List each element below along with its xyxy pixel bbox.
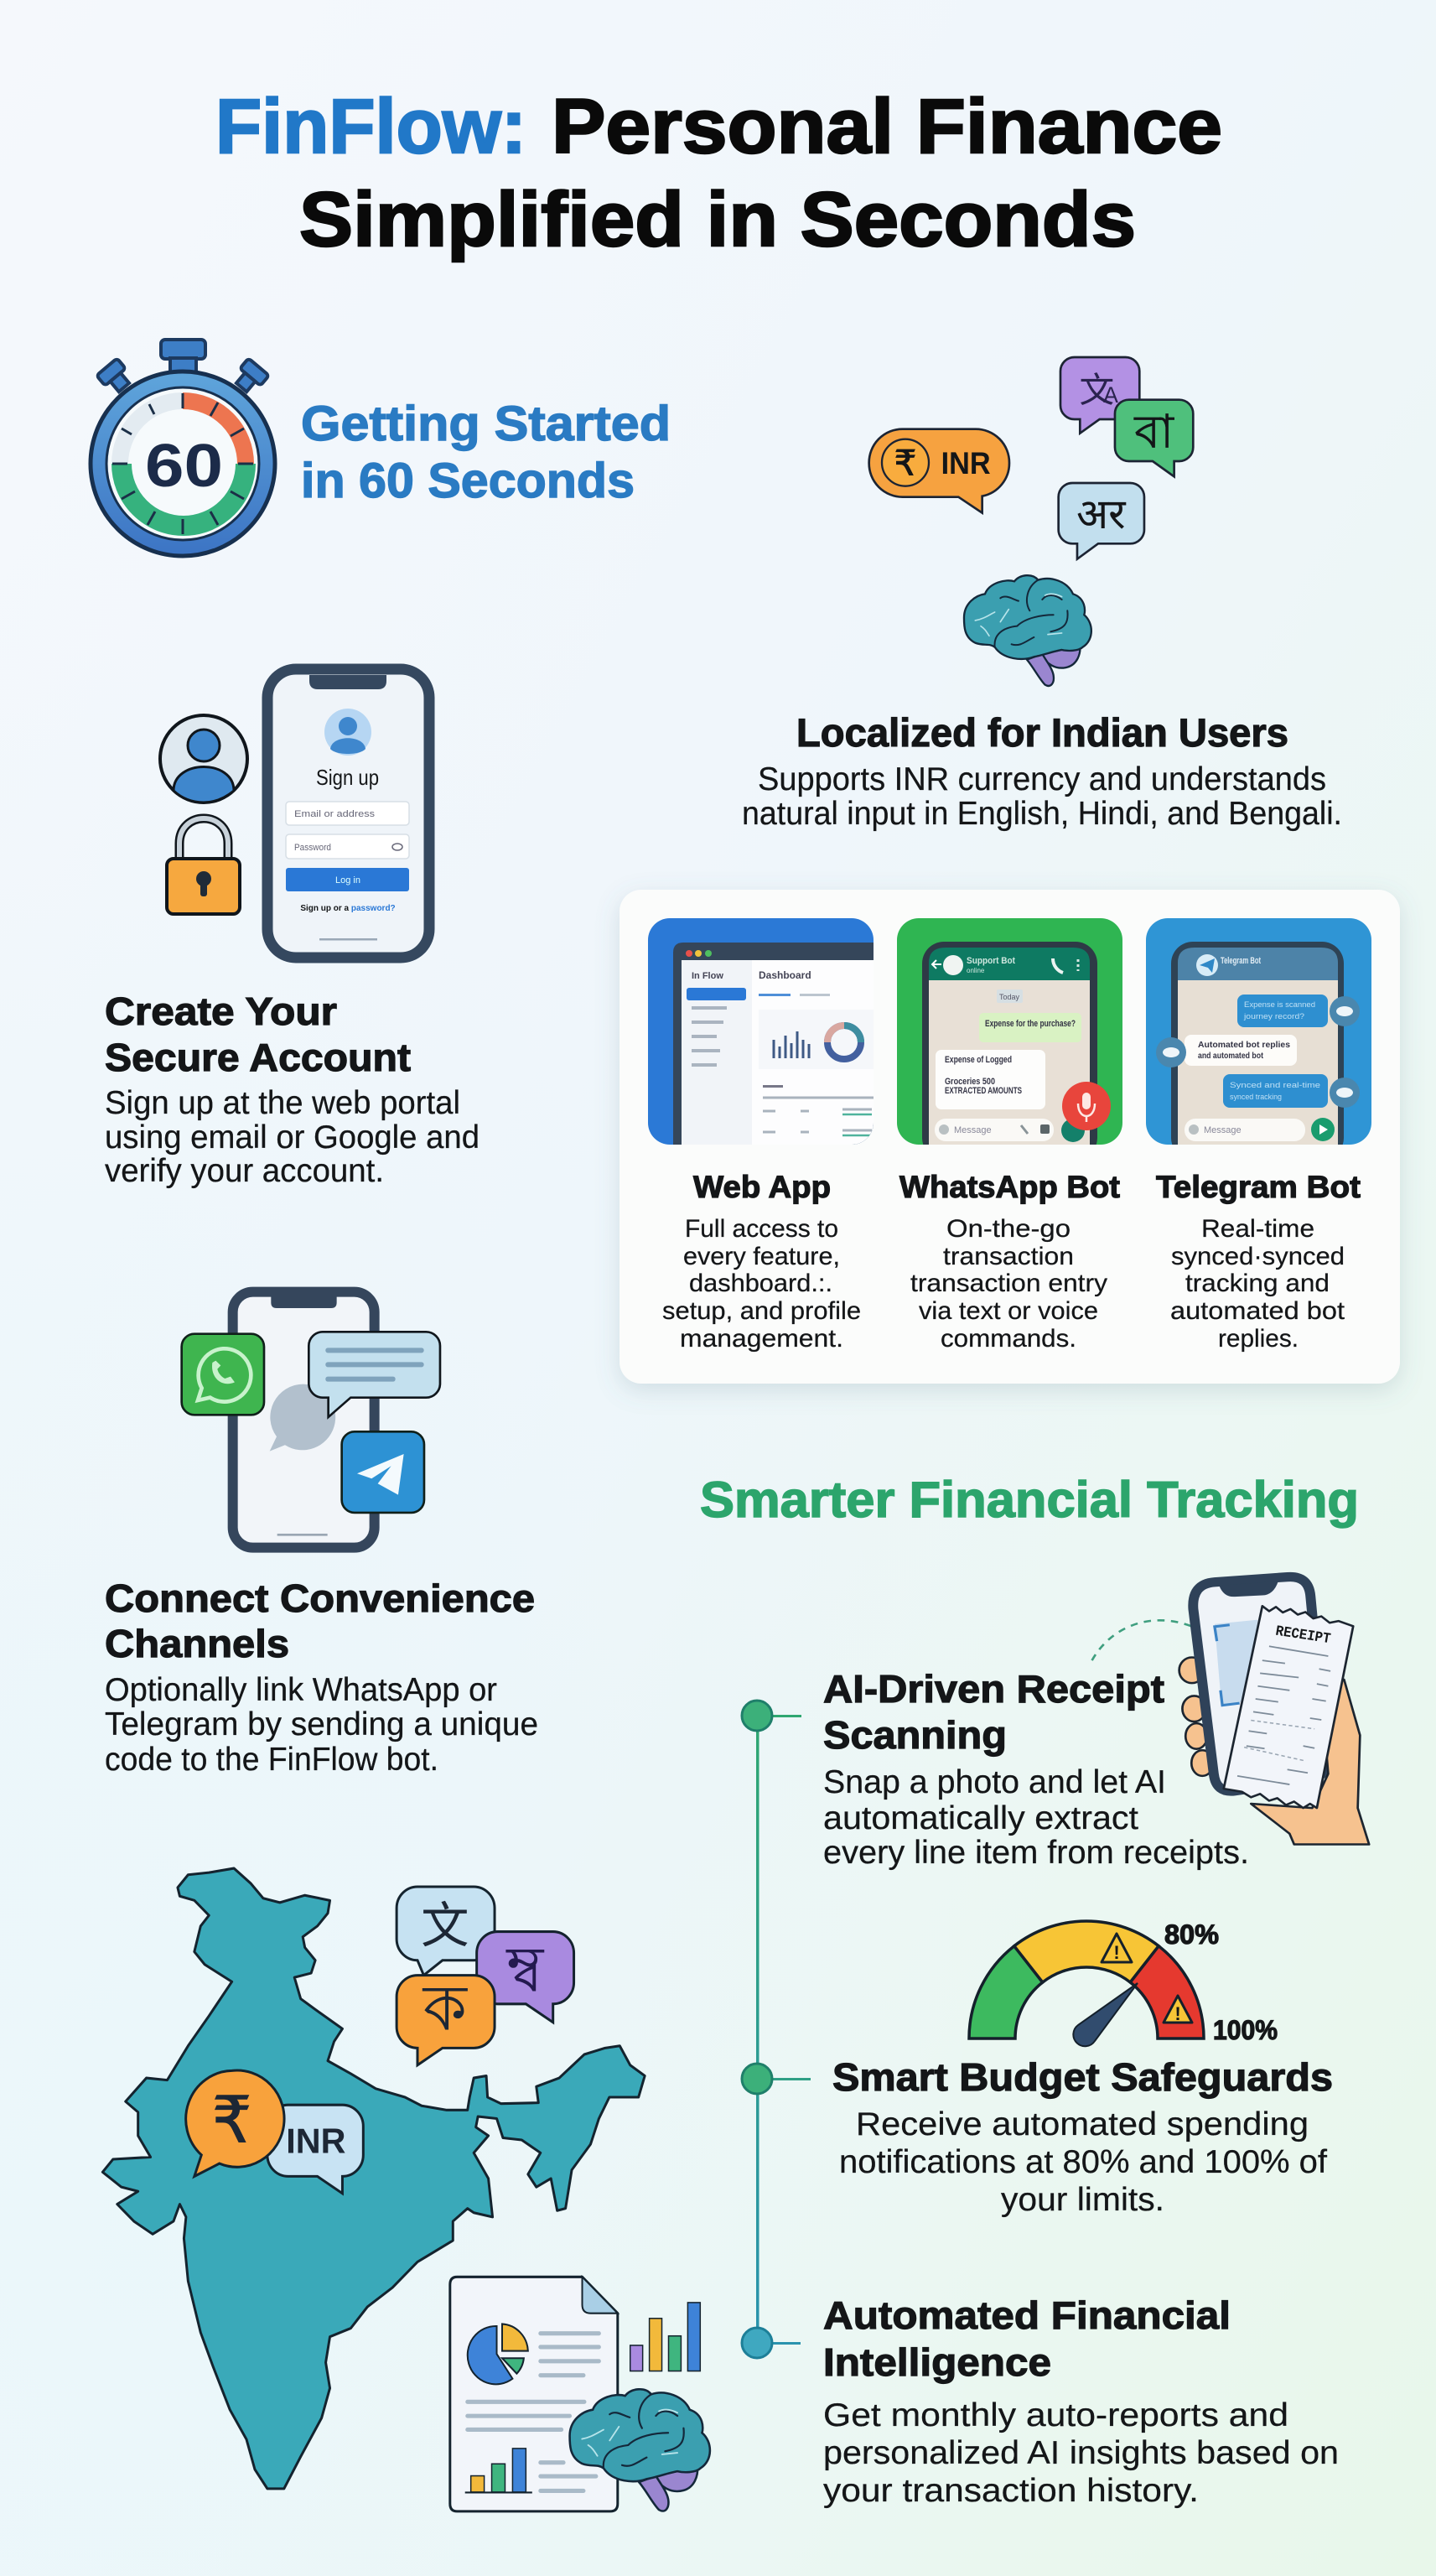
- title: Simplified in Seconds: [299, 177, 1136, 262]
- feature: receipt scanning: every line item from receipts.: [823, 1835, 1249, 1871]
- tile: whatsapp screenshot: [897, 918, 1122, 1160]
- tile: whatsapp screenshot: Groceries 500: [945, 1077, 995, 1087]
- tile: telegram screenshot: Message: [1204, 1125, 1242, 1135]
- feature: budget safeguards: your limits.: [1001, 2182, 1164, 2218]
- timeline: [742, 1701, 811, 2358]
- column: web app: Full access to: [685, 1215, 838, 1243]
- feature: financial intelligence: Get monthly auto-reports and: [823, 2397, 1288, 2433]
- column: telegram bot: tracking and: [1185, 1270, 1330, 1297]
- feature: receipt scanning: AI-Driven Receipt: [823, 1667, 1164, 1711]
- feature: receipt scanning: Snap a photo and let AI: [823, 1764, 1166, 1800]
- icon: hand scanning receipt: [1092, 1576, 1369, 1844]
- tile: web app screenshot: Dashboard: [759, 969, 811, 981]
- icon: hand scanning receipt: RECEIPT: [1274, 1623, 1332, 1648]
- map: india: INR: [286, 2122, 345, 2160]
- bubble: rupee: [186, 2070, 284, 2176]
- tile: telegram screenshot: and automated bot: [1198, 1052, 1264, 1061]
- tile: telegram screenshot: Telegram Bot: [1221, 956, 1261, 966]
- icon: user avatar: [160, 715, 247, 802]
- icon: language and currency bubbles: A: [1103, 382, 1118, 408]
- column: whatsapp bot: On-the-go: [946, 1215, 1071, 1243]
- tile: whatsapp screenshot: online: [967, 967, 985, 974]
- chart: budget gauge: !: [1113, 1942, 1120, 1963]
- icon: phone signup: Log in: [335, 875, 360, 886]
- tile: telegram screenshot: [1146, 918, 1371, 1160]
- icon: phone signup: Password: [294, 843, 331, 853]
- feature: receipt scanning: Scanning: [823, 1713, 1007, 1757]
- heading: getting started: [301, 397, 671, 508]
- column: web app: [662, 1170, 861, 1353]
- column: web app: setup, and profile: [662, 1297, 861, 1325]
- title: [215, 84, 1222, 262]
- icon: language and currency bubbles: अर: [1076, 491, 1127, 538]
- tile: whatsapp screenshot: Expense of Logged: [945, 1055, 1012, 1065]
- icon: phone signup: Sign up: [316, 765, 379, 790]
- feature: budget safeguards: Receive automated spending: [856, 2106, 1309, 2142]
- bubble: languages: [397, 1887, 574, 2065]
- chart: budget gauge: 80%: [1164, 1919, 1219, 1950]
- bubble: languages: ম্ব: [505, 1935, 545, 2006]
- icon: language and currency bubbles: [869, 357, 1193, 686]
- icon: padlock: [167, 818, 240, 914]
- feature: financial intelligence: [823, 2293, 1339, 2509]
- column: telegram bot: synced·synced: [1171, 1243, 1345, 1270]
- step: connect channels: Channels: [105, 1622, 289, 1665]
- step: connect channels: Connect Convenience: [105, 1576, 535, 1620]
- icon: report document: [450, 2277, 710, 2511]
- chart: budget gauge: 100%: [1213, 2015, 1278, 2045]
- heading: smarter financial tracking: Smarter Financial Tracking: [700, 1472, 1359, 1528]
- column: telegram bot: replies.: [1218, 1325, 1299, 1353]
- step: create account: Sign up at the web portal: [105, 1085, 460, 1121]
- tile: telegram screenshot: Expense is scanned: [1244, 1000, 1315, 1009]
- column: whatsapp bot: via text or voice: [919, 1297, 1098, 1325]
- column: telegram bot: Telegram Bot: [1156, 1170, 1361, 1204]
- icon: stopwatch: 60: [145, 433, 223, 500]
- feature: budget safeguards: notifications at 80% and 100% of: [839, 2144, 1327, 2180]
- chart: budget gauge: [969, 1919, 1278, 2046]
- step: create account: [105, 989, 480, 1189]
- column: whatsapp bot: [899, 1170, 1120, 1353]
- chart: budget gauge: !: [1174, 2003, 1181, 2024]
- map: india: ₹: [212, 2085, 251, 2157]
- heading: getting started: Getting Started: [301, 397, 671, 451]
- column: web app: management.: [680, 1325, 843, 1353]
- column: whatsapp bot: transaction entry: [910, 1270, 1107, 1297]
- icon: phone signup: Email or address: [294, 809, 376, 819]
- tile: web app screenshot: In Flow: [692, 971, 723, 981]
- text: localized description: Supports INR currency and understands: [758, 761, 1326, 797]
- icon: stopwatch: [91, 340, 275, 556]
- column: telegram bot: automated bot: [1170, 1297, 1345, 1325]
- column: telegram bot: Real-time: [1201, 1215, 1314, 1243]
- tile: whatsapp screenshot: Support Bot: [967, 956, 1015, 966]
- column: web app: Web App: [693, 1170, 831, 1204]
- feature: financial intelligence: Automated Financial: [823, 2293, 1231, 2337]
- column: whatsapp bot: WhatsApp Bot: [899, 1170, 1120, 1204]
- icon: language and currency bubbles: বা: [1133, 405, 1174, 457]
- heading: localized: [742, 710, 1342, 832]
- feature: financial intelligence: Intelligence: [823, 2340, 1051, 2384]
- icon: phone signup: [267, 669, 429, 958]
- title: Personal Finance: [552, 84, 1222, 169]
- tile: whatsapp screenshot: Expense for the purchase?: [985, 1019, 1076, 1029]
- step: create account: using email or Google and: [105, 1119, 480, 1156]
- column: whatsapp bot: commands.: [941, 1325, 1076, 1353]
- icon: language and currency bubbles: 文: [1079, 370, 1114, 409]
- column: web app: every feature,: [683, 1243, 840, 1270]
- step: connect channels: [105, 1576, 538, 1778]
- map: india: [102, 1868, 710, 2511]
- tile: whatsapp screenshot: Message: [954, 1125, 992, 1135]
- feature: financial intelligence: your transaction history.: [823, 2473, 1199, 2509]
- heading: getting started: in 60 Seconds: [301, 454, 635, 508]
- tile: telegram screenshot: Automated bot replies: [1198, 1041, 1290, 1050]
- panel: platforms card: [620, 890, 1400, 1384]
- step: create account: verify your account.: [105, 1153, 384, 1189]
- step: create account: Create Your: [105, 989, 337, 1033]
- step: connect channels: code to the FinFlow bot.: [105, 1742, 438, 1778]
- feature: financial intelligence: personalized AI insights based on: [823, 2435, 1339, 2471]
- feature: budget safeguards: [832, 2055, 1333, 2218]
- icon: language and currency bubbles: ₹: [894, 444, 916, 483]
- tile: whatsapp screenshot: EXTRACTED AMOUNTS: [945, 1086, 1022, 1096]
- step: connect channels: Optionally link WhatsApp or: [105, 1672, 497, 1708]
- column: web app: dashboard.:.: [689, 1270, 832, 1297]
- icon: phone with channels: [182, 1292, 440, 1548]
- heading: localized: Localized for Indian Users: [796, 710, 1288, 755]
- icon: language and currency bubbles: INR: [941, 446, 991, 480]
- tile: telegram screenshot: synced tracking: [1230, 1093, 1282, 1101]
- tile: telegram screenshot: Synced and real-time: [1230, 1081, 1320, 1089]
- bubble: INR: [267, 2105, 363, 2194]
- column: whatsapp bot: transaction: [943, 1243, 1074, 1270]
- heading: localized: natural input in English, Hindi, and Bengali.: [742, 796, 1342, 832]
- step: create account: Secure Account: [105, 1036, 411, 1079]
- tile: web app screenshot: [648, 918, 874, 1145]
- bubble: languages: ক: [423, 1973, 469, 2044]
- feature: receipt scanning: [823, 1667, 1249, 1871]
- tile: whatsapp screenshot: Today: [999, 993, 1020, 1001]
- icon: phone signup: Sign up or a password?: [300, 904, 396, 913]
- column: telegram bot: [1156, 1170, 1361, 1353]
- bubble: languages: 文: [421, 1899, 469, 1953]
- feature: receipt scanning: automatically extract: [823, 1800, 1138, 1836]
- tile: telegram screenshot: journey record?: [1243, 1012, 1304, 1021]
- feature: budget safeguards: Smart Budget Safeguards: [832, 2055, 1333, 2099]
- title: FinFlow:: [215, 84, 526, 169]
- step: connect channels: Telegram by sending a unique: [105, 1706, 538, 1742]
